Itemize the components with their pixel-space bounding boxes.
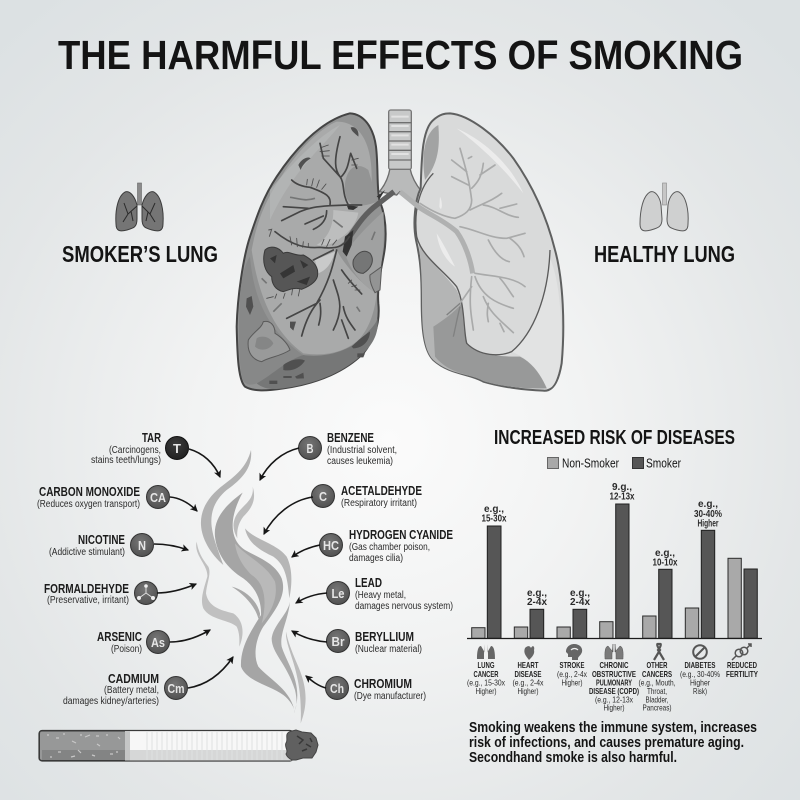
disease: other cancers: Throat, (647, 686, 667, 696)
bar chart: 15-30x (482, 514, 507, 524)
disease: lung cancer: LUNG (478, 660, 495, 670)
chart legend (548, 456, 682, 470)
chemical: chromium (306, 676, 426, 702)
illustration: lungs (237, 110, 563, 391)
smoker's left lung (237, 113, 394, 390)
disease: other cancers: (e.g., Mouth, (638, 678, 676, 688)
chemical: beryllium (292, 629, 422, 655)
chemical: nicotine (49, 532, 188, 558)
chemical: cadmium: Cm (168, 681, 184, 696)
cigarette (39, 730, 318, 761)
disease: lung cancer: Higher) (476, 686, 497, 696)
chemical: benzene: causes leukemia) (327, 456, 393, 467)
bar chart: 2-4x (527, 597, 547, 608)
disease: other cancers: OTHER (646, 660, 668, 670)
disease: lung cancer: CANCER (474, 669, 498, 679)
chemical: formaldehyde (44, 581, 196, 606)
disease: copd: Higher) (604, 702, 625, 712)
chemical: tar: stains teeth/lungs) (91, 455, 161, 466)
chemical: cadmium: CADMIUM (108, 671, 159, 686)
bar chart: Higher (698, 518, 719, 530)
bar chart: 10-10x (652, 558, 678, 568)
chemical: acetaldehyde: C (319, 489, 328, 504)
chemical: tar (91, 430, 220, 477)
chemical: chromium: (Dye manufacturer) (354, 691, 426, 702)
bar chart: e.g., (484, 504, 504, 515)
disease: reduced fertility: REDUCED (727, 660, 757, 670)
trachea (379, 110, 422, 207)
disease: lung cancer: (e.g., 15-30x (467, 678, 506, 688)
disease: stroke: (e.g., 2-4x (557, 669, 588, 679)
bar chart: 30-40% (694, 509, 722, 520)
disease: heart disease: HEART (518, 660, 539, 670)
smoke plume (196, 450, 306, 723)
disease: heart disease: DISEASE (514, 669, 542, 679)
disease: diabetes: DIABETES (684, 660, 716, 670)
disease: copd: OBSTRUCTIVE (592, 669, 636, 679)
disease: other cancers: CANCERS (642, 669, 672, 679)
chemical: nicotine: NICOTINE (78, 532, 125, 547)
chemical: lead: Le (332, 586, 344, 601)
chemical: benzene: BENZENE (327, 430, 374, 445)
chemical: chromium: Ch (330, 681, 344, 696)
disease: reduced fertility: FERTILITY (726, 669, 758, 679)
closing statement: Smoking weakens the immune system, increases (469, 720, 757, 736)
chemical: hydrogen cyanide: damages cilia) (349, 553, 403, 564)
lesions (353, 251, 372, 273)
disease: other cancers: Pancreas) (642, 702, 672, 712)
chemical: tar: T (173, 441, 181, 456)
bar chart: e.g., (570, 588, 590, 599)
chemical: tar: (Carcinogens, (109, 445, 161, 456)
chemical: tar: TAR (142, 430, 161, 445)
chemical: acetaldehyde: (Respiratory irritant) (341, 498, 417, 509)
bar chart: 2-4x (570, 597, 590, 608)
disease: other cancers (638, 644, 676, 712)
chemical: benzene: (Industrial solvent, (327, 445, 397, 456)
disease: copd: PULMONARY (596, 678, 632, 688)
icon: small healthy lung (640, 183, 688, 231)
disease: diabetes: (e.g., 30-40% (680, 669, 720, 679)
chemical: lead: damages nervous system) (355, 601, 453, 612)
disease: copd (589, 644, 639, 712)
chemical: beryllium: (Nuclear material) (355, 644, 422, 655)
chart legend: Smoker (646, 456, 682, 470)
disease: copd: DISEASE (COPD) (589, 686, 639, 696)
bronchial branches (320, 137, 362, 205)
closing statement: Secondhand smoke is also harmful. (469, 750, 677, 766)
chemical: arsenic (97, 629, 210, 655)
chemical: acetaldehyde: ACETALDEHYDE (341, 483, 422, 498)
chemical: hydrogen cyanide: HYDROGEN CYANIDE (349, 527, 453, 542)
healthy right lung (400, 113, 563, 391)
bar chart: 12-13x (610, 492, 635, 502)
chemical: arsenic: As (151, 635, 165, 650)
inner lobes (252, 122, 377, 354)
chemical: hydrogen cyanide: HC (323, 538, 340, 553)
bar chart: 9.g., (612, 482, 632, 493)
chemical: acetaldehyde (264, 483, 422, 534)
bar chart: e.g., (527, 588, 547, 599)
chemical: lead: (Heavy metal, (355, 590, 406, 601)
chemical: lead (296, 575, 453, 612)
chemical: cadmium: (Battery metal, (104, 685, 159, 696)
chemical: arsenic: ARSENIC (97, 629, 142, 644)
disease: copd: CHRONIC (600, 660, 628, 670)
chemical: hydrogen cyanide: (Gas chamber poison, (349, 542, 430, 553)
heading: smoker's lung: SMOKER’S LUNG (62, 241, 218, 267)
chemical: beryllium: BERYLLIUM (355, 629, 414, 644)
chemical: cadmium: damages kidney/arteries) (63, 696, 159, 707)
disease: heart disease: (e.g., 2-4x (512, 678, 544, 688)
disease: lung cancer (467, 644, 506, 696)
chemical: nicotine: N (138, 538, 146, 553)
bar chart (467, 482, 762, 638)
closing statement: risk of infections, and causes premature aging. (469, 735, 744, 751)
chemical: cadmium (63, 657, 233, 707)
disease: heart disease (512, 646, 544, 696)
tumor (264, 247, 318, 292)
disease: heart disease: Higher) (518, 686, 539, 696)
chemical: formaldehyde: (Preservative, irritant) (47, 595, 129, 606)
bronchus (348, 192, 394, 238)
chemical: benzene: B (306, 441, 314, 456)
chemical: carbon monoxide: CARBON MONOXIDE (39, 484, 140, 499)
soot spots (246, 127, 370, 384)
chemical: carbon monoxide (37, 484, 197, 511)
chemical: hydrogen cyanide (292, 527, 453, 564)
heading: healthy lung: HEALTHY LUNG (594, 241, 735, 267)
disease: diabetes: Risk) (693, 686, 707, 696)
chart heading: INCREASED RISK OF DISEASES (494, 427, 735, 449)
disease: stroke (557, 644, 588, 688)
disease: stroke: Higher) (562, 678, 583, 688)
bar chart: e.g., (698, 499, 718, 510)
chemical: chromium: CHROMIUM (354, 676, 412, 691)
chemical: carbon monoxide: (Reduces oxygen transport) (37, 499, 140, 510)
disease: stroke: STROKE (560, 660, 585, 670)
disease: diabetes (680, 645, 720, 696)
disease: diabetes: Higher (690, 678, 710, 688)
chemical: arsenic: (Poison) (111, 644, 142, 655)
chart legend: Non-Smoker (562, 456, 620, 470)
disease: copd: (e.g., 12-13x (595, 694, 634, 704)
chemical: carbon monoxide: CA (150, 490, 167, 505)
chemical: lead: LEAD (355, 575, 382, 590)
closing statement (469, 720, 757, 766)
chemical: beryllium: Br (332, 634, 344, 649)
chemical: formaldehyde: FORMALDEHYDE (44, 581, 129, 596)
disease: other cancers: Bladder, (646, 694, 668, 704)
bar chart: e.g., (655, 548, 675, 559)
chemical: nicotine: (Addictive stimulant) (49, 547, 125, 558)
chemical: benzene (260, 430, 397, 480)
icon: small smoker's lung (116, 183, 163, 231)
disease: reduced fertility (726, 644, 758, 679)
